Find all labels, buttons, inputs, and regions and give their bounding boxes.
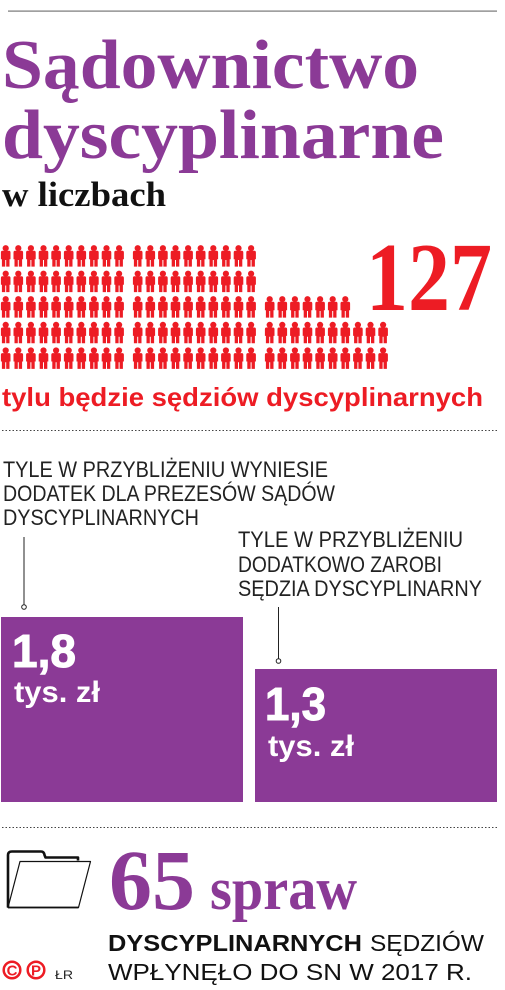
pointer: right [276,607,281,663]
title [2,27,444,174]
icon: folder [8,852,90,908]
number: 65 spraw [109,832,358,928]
bar: 1,8 tys. zł: tys. zł [14,676,101,709]
caption: cases: WPŁYNĘŁO DO SN W 2017 R. [108,959,472,985]
bar: 1,3 tys. zł: tys. zł [268,730,355,763]
number: 65 spraw: 65 [109,832,195,928]
credits: copyright mark: P [31,962,41,980]
label: judge bonus: DODATKOWO ZAROBI [238,552,442,577]
label: presidents bonus: DYSCYPLINARNYCH [3,505,199,530]
label: presidents bonus: TYLE W PRZYBLIŻENIU WYNIESIE [3,457,328,482]
number: 65 spraw: spraw [210,856,358,922]
credits: copyright mark [4,962,44,980]
credits: copyright mark: C [7,962,18,980]
subtitle: w liczbach [2,175,166,214]
caption: cases: SĘDZIÓW [370,930,485,956]
bar: 1,8 tys. zł [1,617,243,802]
caption: cases: DYSCYPLINARNYCH [108,930,362,956]
pictogram: 127 judges [1,245,388,369]
bar: 1,3 tys. zł [255,669,497,802]
label: judge bonus [238,527,482,601]
label: presidents bonus: DODATEK DLA PREZESÓW SĄDÓW [3,481,335,506]
bar: 1,8 tys. zł: 1,8 [12,625,76,677]
caption: cases [108,930,485,985]
bar: 1,3 tys. zł: 1,3 [265,678,326,730]
credits: author: ŁR [55,970,73,982]
pointer: left [22,537,26,609]
label: judge bonus: TYLE W PRZYBLIŻENIU [238,527,463,552]
caption: judges: tylu będzie sędziów dyscyplinarnych [2,382,483,412]
title: Sądownictwo [2,27,419,104]
label: presidents bonus [3,457,335,530]
title: dyscyplinarne [2,97,444,174]
label: judge bonus: SĘDZIA DYSCYPLINARNY [238,576,482,601]
